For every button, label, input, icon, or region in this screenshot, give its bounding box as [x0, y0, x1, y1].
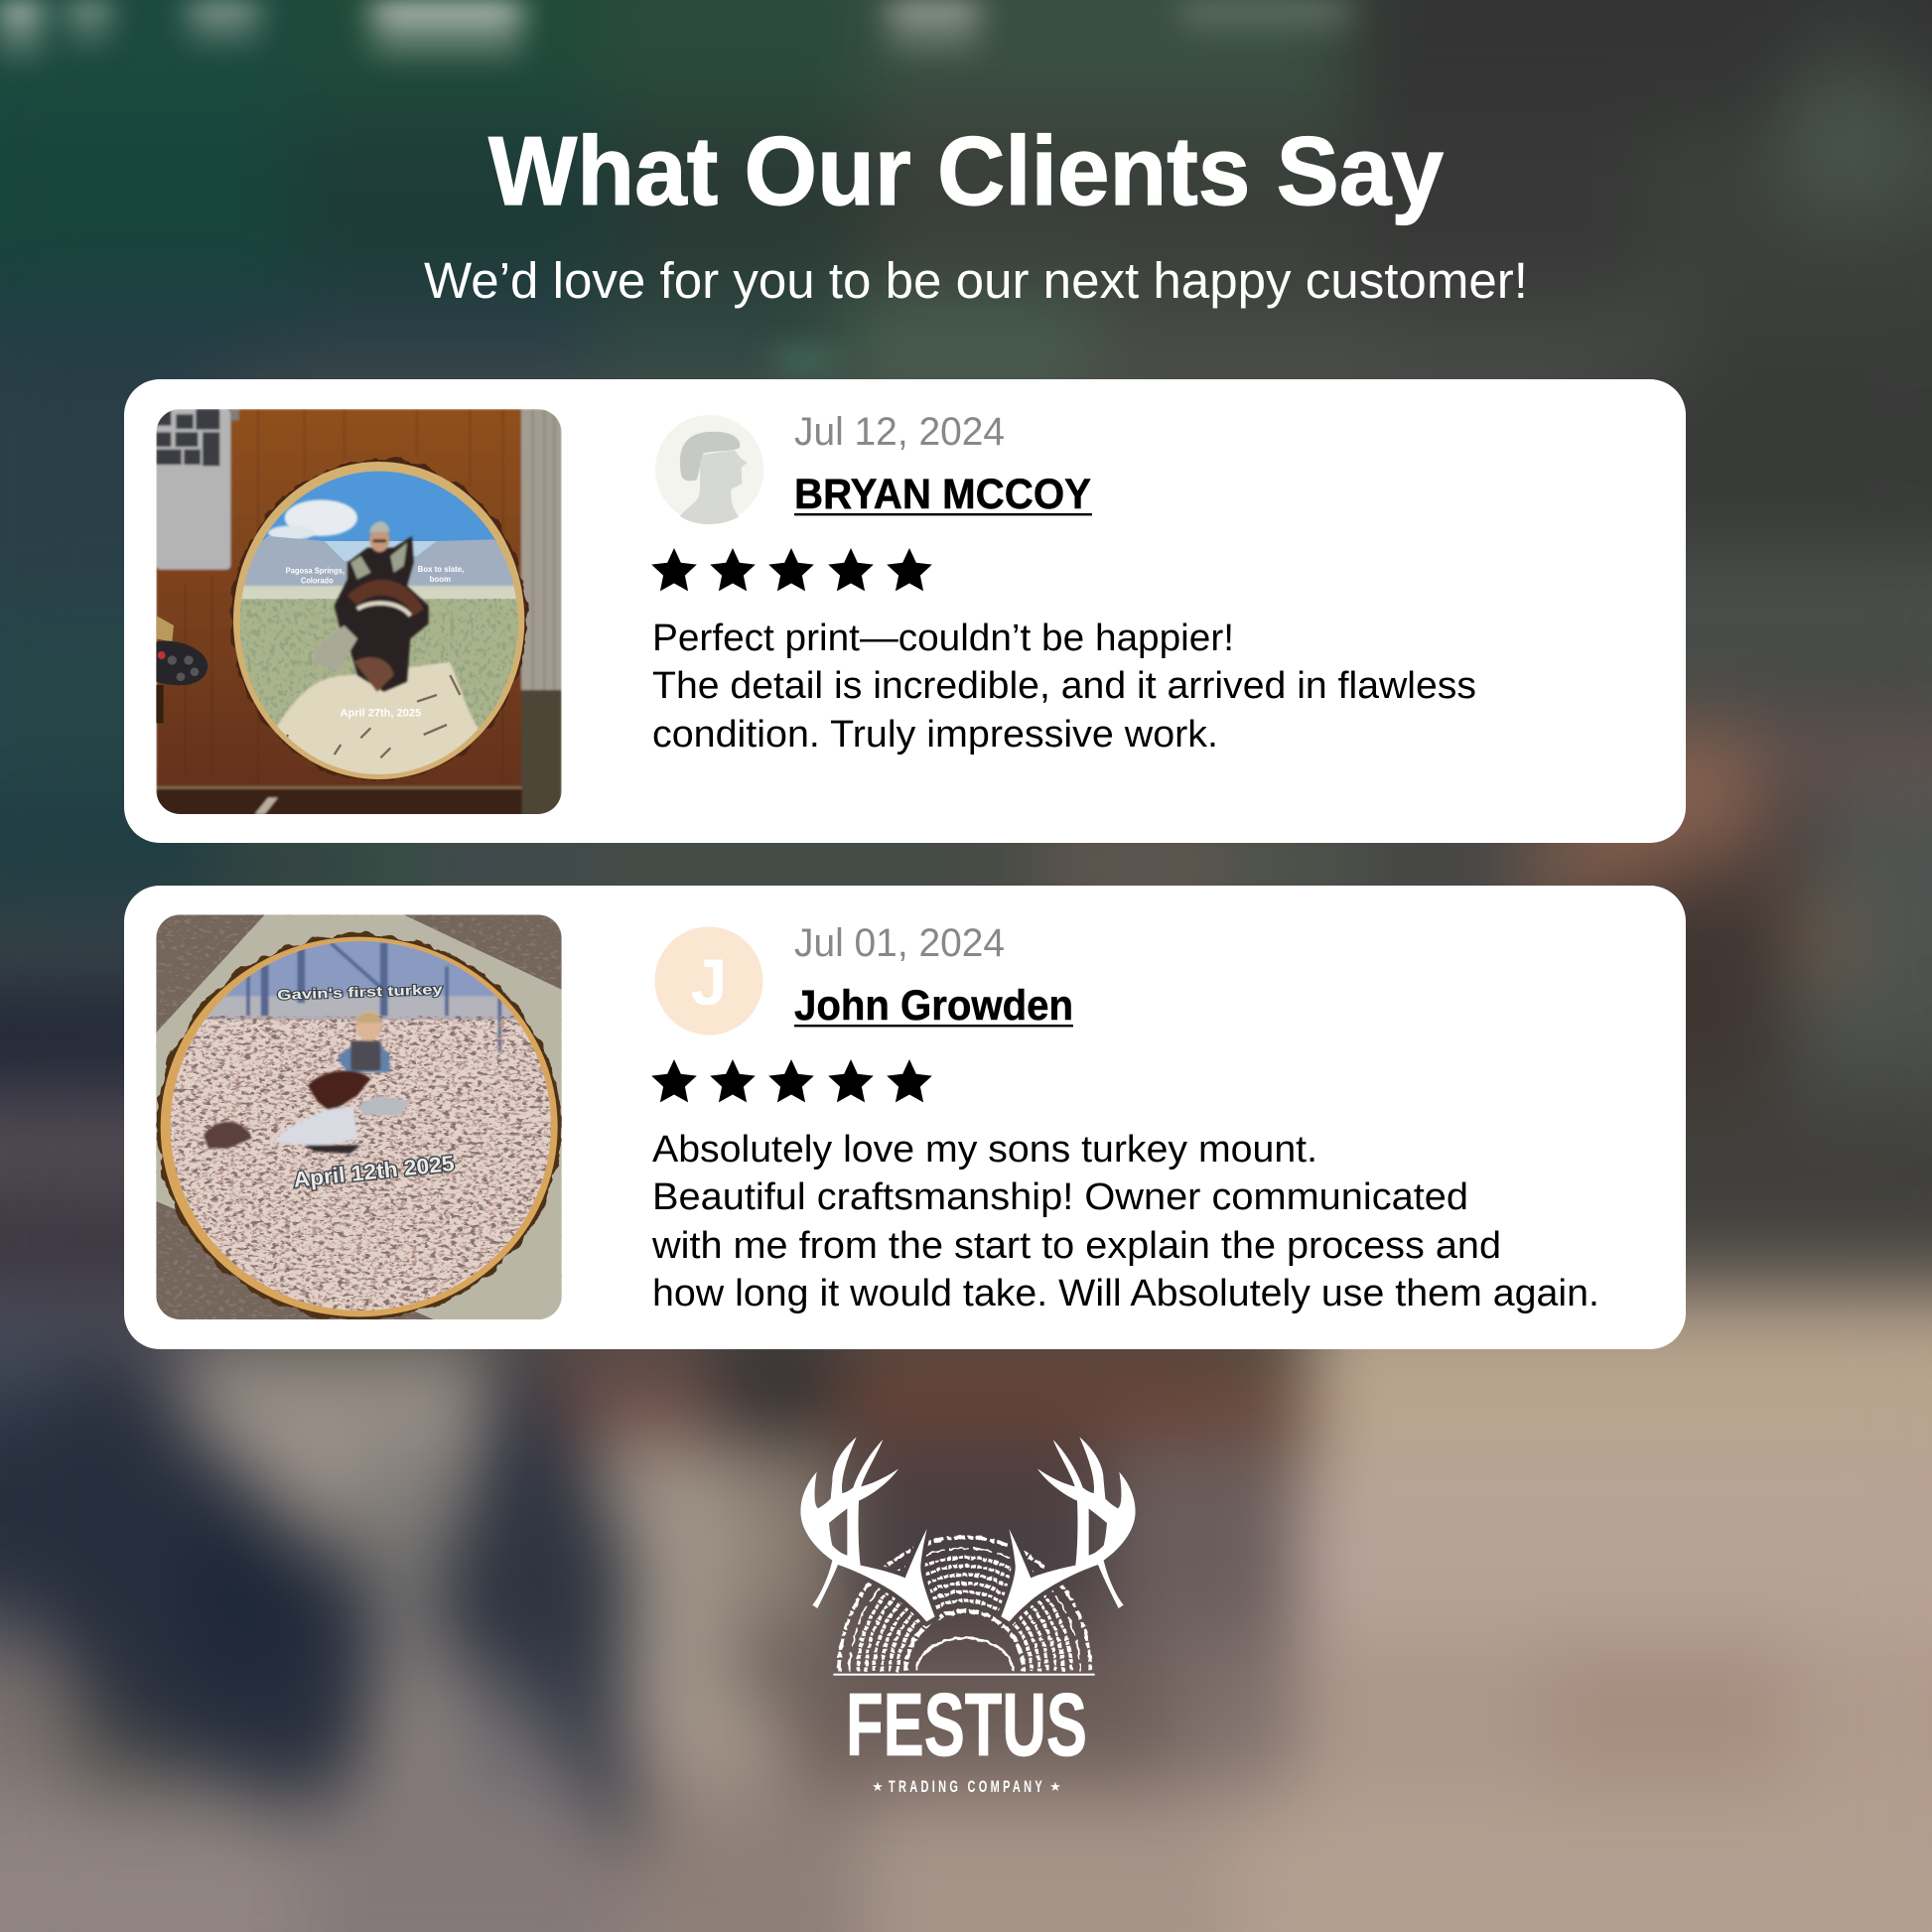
review text: The detail is incredible, and it arrived in flawless: [652, 665, 1476, 707]
review date: Jul 12, 2024: [794, 410, 1005, 454]
reviewer name: BRYAN MCCOY: [794, 471, 1091, 518]
reviewer name: John Growden: [794, 982, 1073, 1030]
wordmark: FESTUS: [846, 1676, 1087, 1775]
logo: Festus Trading Company: [800, 1437, 1136, 1796]
review date: Jul 01, 2024: [794, 921, 1005, 965]
hunter with turkey: [315, 521, 429, 692]
review text: [652, 618, 1476, 756]
tagline: TRADING COMPANY: [889, 1778, 1045, 1796]
panel: review card John Growden: [124, 886, 1686, 1349]
icon: antlers over tree rings: [800, 1437, 1136, 1676]
photo: turkey print on wood slice on burlap: April 12th 2025: [292, 1151, 456, 1192]
five star rating: [651, 548, 932, 591]
avatar: grey silhouette: [655, 415, 763, 524]
review text: condition. Truly impressive work.: [652, 714, 1218, 756]
photo: turkey print on wood slice on desk: [156, 409, 562, 816]
tagline: ★: [1049, 1779, 1061, 1794]
photo: turkey print on wood slice on burlap: Gavin's first turkey: [277, 981, 443, 1003]
tagline: ★: [872, 1779, 884, 1794]
tagline: [872, 1778, 1061, 1796]
child with turkey: [271, 1011, 410, 1154]
photo: turkey print on wood slice on burlap: [156, 914, 562, 1319]
title: What Our Clients Say: [488, 116, 1444, 225]
avatar: initial J: J: [691, 945, 727, 1019]
subtitle: We’d love for you to be our next happy customer!: [424, 252, 1528, 309]
review text: Absolutely love my sons turkey mount.: [652, 1129, 1317, 1171]
photo: turkey print on wood slice on desk: Box to slate,: [418, 565, 464, 574]
review text: Perfect print—couldn’t be happier!: [652, 618, 1234, 659]
photo: turkey print on wood slice on desk: April 27th, 2025: [340, 707, 421, 719]
review text: with me from the start to explain the process and: [651, 1225, 1501, 1267]
review text: [651, 1129, 1599, 1314]
photo: turkey print on wood slice on desk: boom: [430, 575, 451, 584]
photo: turkey print on wood slice on desk: Colorado: [301, 577, 334, 586]
five star rating: [651, 1059, 932, 1102]
panel: review card Bryan McCoy: [124, 379, 1686, 843]
avatar: initial J: [655, 927, 762, 1035]
keys: [156, 616, 207, 723]
photo: turkey print on wood slice on desk: Pagosa Springs,: [286, 566, 345, 575]
review text: how long it would take. Will Absolutely use them again.: [652, 1273, 1599, 1314]
review text: Beautiful craftsmanship! Owner communicated: [652, 1176, 1468, 1218]
